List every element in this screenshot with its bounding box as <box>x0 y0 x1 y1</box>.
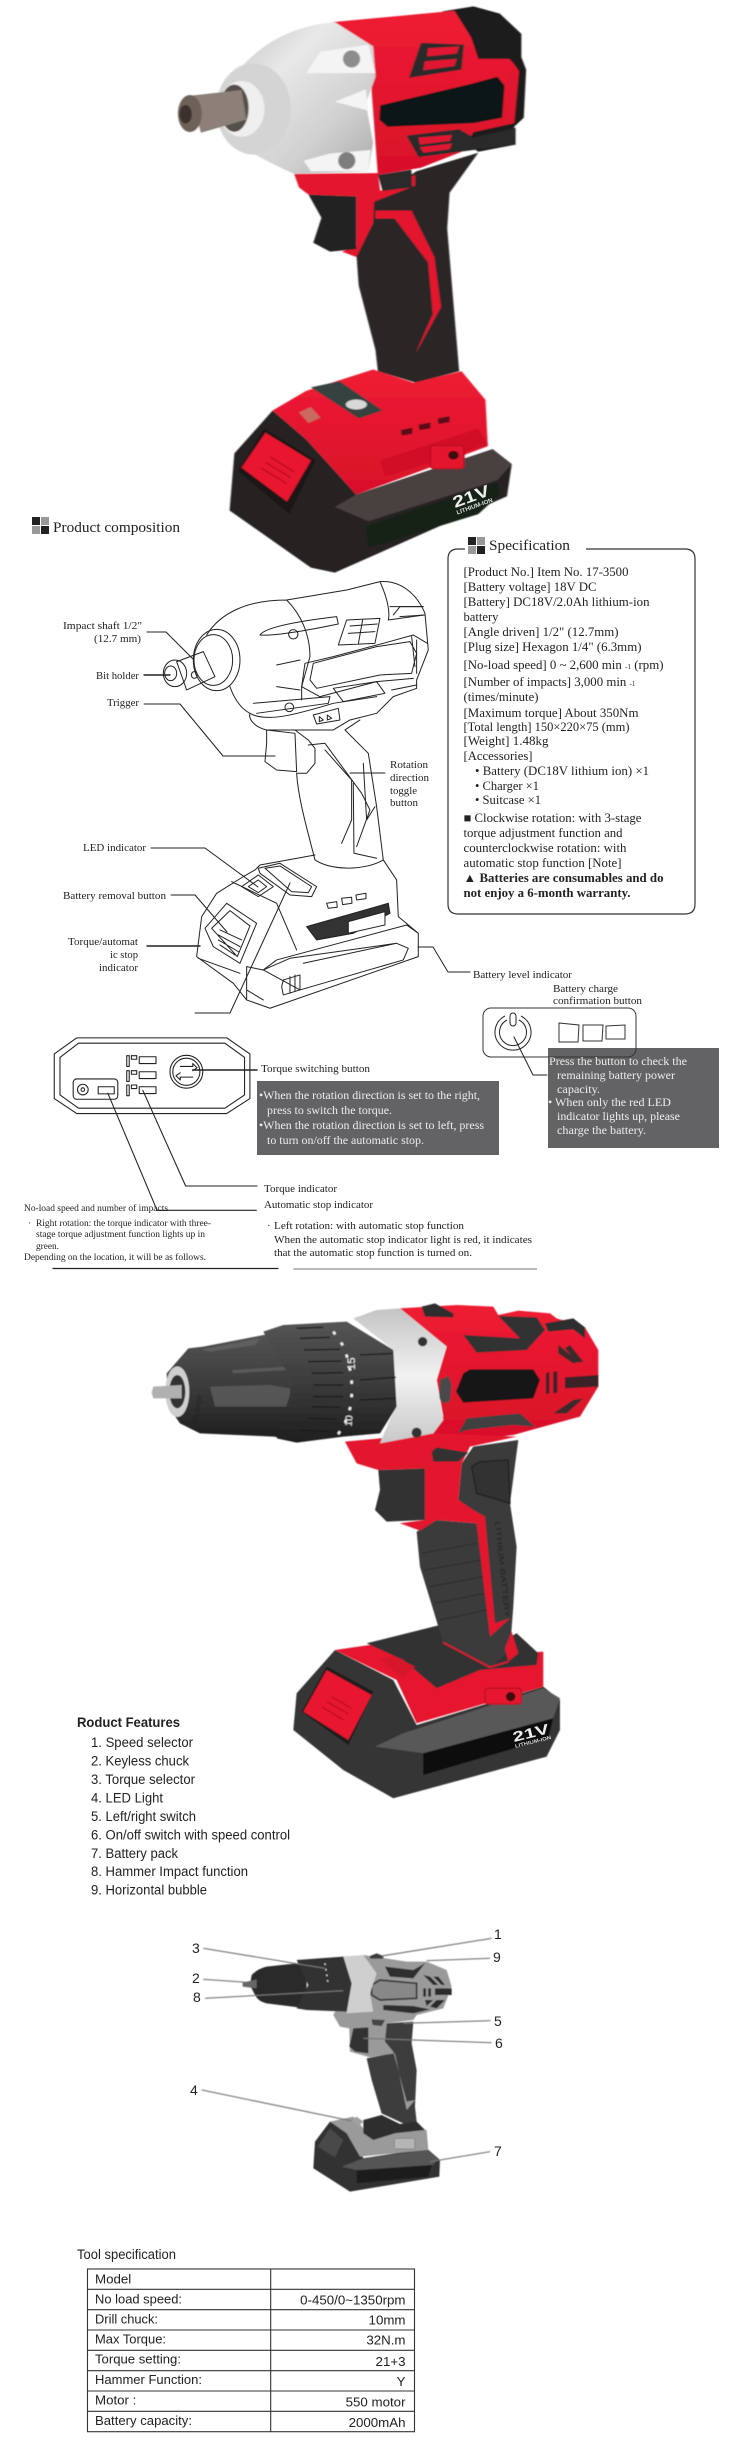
callout numbers: 5 <box>494 2013 502 2029</box>
side window <box>456 1369 540 1403</box>
control panel drawing <box>54 1038 257 1210</box>
panel: specification <box>448 537 695 914</box>
pack top strip <box>335 449 512 521</box>
note: left rotation: that the automatic stop function is turned on. <box>274 1247 472 1259</box>
heading text: Product composition <box>53 520 181 536</box>
lower dark patch <box>458 1413 535 1433</box>
diagram: greyscale drill with numbered callouts <box>190 1926 503 2192</box>
grip marking: LITHIUM BATTERY <box>493 1521 512 1618</box>
label: torque stop indicator: ic stop <box>110 949 138 961</box>
pack window <box>263 943 408 995</box>
pack window <box>366 482 500 548</box>
vent lower <box>407 128 516 157</box>
battery shell <box>293 1650 560 1798</box>
grip <box>356 153 478 383</box>
row values: 21+3 <box>376 2354 406 2369</box>
top vent <box>338 618 380 645</box>
textured pad <box>380 428 488 477</box>
release recess <box>238 428 316 514</box>
clutch <box>297 1957 352 2012</box>
spec list: not enjoy a 6-month warranty. <box>464 886 630 900</box>
front slider <box>439 1376 452 1403</box>
release button <box>303 1670 372 1740</box>
battery mount red <box>273 369 488 494</box>
label: impact shaft: Impact shaft 1/2" <box>63 620 142 632</box>
panel outline <box>54 1038 250 1114</box>
label: automatic stop: Automatic stop indicator <box>264 1199 373 1211</box>
note: left rotation: Left rotation: with automatic stop function <box>274 1220 465 1232</box>
label: torque stop indicator: indicator <box>99 962 138 974</box>
leader: rotation toggle <box>350 772 385 774</box>
spec list: counterclockwise rotation: with <box>464 841 627 855</box>
features list <box>91 1735 290 1898</box>
spec list: torque adjustment function and <box>464 826 623 840</box>
top dark patch <box>463 1316 545 1353</box>
spec list: [Weight] 1.48kg <box>464 734 549 748</box>
mount lanyard <box>485 1688 522 1704</box>
leader: impact shaft <box>147 632 193 659</box>
spec frame <box>448 549 695 914</box>
direction switch <box>432 1447 468 1462</box>
charge note text <box>548 1054 687 1137</box>
charge note text: Press the button to check the <box>549 1054 687 1068</box>
battery pack shell <box>230 411 512 573</box>
photo: impact wrench <box>178 6 526 573</box>
auto stop cell <box>73 1079 118 1099</box>
spec list: [No-load speed] 0 ~ 2,600 min -1 (rpm) <box>464 658 664 672</box>
row values: 32N.m <box>366 2332 406 2348</box>
collar vents <box>483 1669 519 1682</box>
rear slot <box>507 70 517 120</box>
side window <box>379 77 505 127</box>
callout numbers <box>190 1926 503 2159</box>
callout numbers: 3 <box>192 1940 200 1956</box>
leader: LED indicator <box>151 848 258 887</box>
spec list: [Battery] DC18V/2.0Ah lithium-ion <box>464 595 650 609</box>
drive end <box>178 95 202 132</box>
bit <box>152 1385 182 1398</box>
motor housing <box>332 11 519 175</box>
spec list: • Suitcase ×1 <box>475 793 541 807</box>
charge note box <box>548 1048 719 1148</box>
heading icon <box>32 517 49 534</box>
panel button <box>346 399 367 409</box>
grip <box>417 1440 518 1668</box>
spec list: [Battery voltage] 18V DC <box>464 580 596 594</box>
torque note text: •When the rotation direction is set to left, press <box>259 1118 484 1132</box>
battery collar <box>367 1625 538 1688</box>
note: right rotation: No-load speed and number of impacts <box>24 1203 168 1214</box>
note: left rotation: · <box>267 1220 271 1232</box>
spec list: [Accessories] <box>464 749 532 763</box>
pack strip <box>342 2150 438 2170</box>
top slots <box>327 893 366 908</box>
LED panel <box>311 381 383 418</box>
label: LED indicator: LED indicator <box>83 842 146 854</box>
battery mount red <box>335 1643 543 1723</box>
note: right rotation: green. <box>36 1242 59 1252</box>
collar ribs <box>297 1327 396 1432</box>
features list: 3. Torque selector <box>91 1772 195 1787</box>
side window <box>372 1980 417 2000</box>
spec list: automatic stop function [Note] <box>464 856 622 870</box>
screw bottom <box>338 152 355 169</box>
mount dark <box>363 2115 425 2140</box>
row labels: Drill chuck: <box>95 2312 158 2326</box>
bit <box>243 1979 257 1988</box>
trigger <box>349 2027 368 2053</box>
top knob <box>370 1953 383 1959</box>
row labels: Max Torque: <box>95 2332 166 2346</box>
note: right rotation <box>24 1203 211 1263</box>
spec list: • Charger ×1 <box>475 779 539 793</box>
row labels: Hammer Function: <box>95 2372 202 2387</box>
features list: 7. Battery pack <box>91 1846 178 1861</box>
toggle <box>313 708 340 724</box>
note: left rotation: When the automatic stop indicator light is red, it indicates <box>274 1234 532 1246</box>
callout lines <box>202 1938 492 2162</box>
leader: battery level <box>418 947 470 972</box>
label: impact shaft <box>63 620 142 645</box>
LED lens <box>242 875 273 897</box>
panel: battery charge confirmation <box>483 983 719 1148</box>
rear housing <box>400 1305 598 1440</box>
charge level squares <box>559 1023 625 1042</box>
callout numbers: 9 <box>493 1949 501 1965</box>
row labels: Model <box>95 2272 131 2286</box>
shell strip <box>375 1688 560 1753</box>
body <box>333 1955 452 2110</box>
leader: torque button <box>193 1068 257 1072</box>
top oval <box>258 863 317 897</box>
lanyard mount <box>348 912 385 933</box>
pack <box>313 2122 440 2192</box>
torque note text: to turn on/off the automatic stop. <box>267 1133 424 1147</box>
leader: auto stop <box>108 1093 256 1210</box>
text block: product features <box>77 1714 290 1898</box>
charge note text: • When only the red LED <box>548 1095 671 1109</box>
silver gear case <box>218 22 375 174</box>
spec icon <box>468 537 485 554</box>
leader: power button <box>514 1037 547 1075</box>
leader: bit holder <box>144 674 170 676</box>
grip panel <box>472 1460 510 1503</box>
row values: 550 motor <box>346 2394 406 2410</box>
spec list: [Product No.] Item No. 17-3500 <box>464 565 628 579</box>
spec list: [Angle driven] 1/2" (12.7mm) <box>464 625 618 639</box>
spec list: [Plug size] Hexagon 1/4" (6.3mm) <box>464 640 642 654</box>
spec list: (times/minute) <box>464 690 538 704</box>
bit ring inner <box>169 1375 185 1408</box>
label: torque stop indicator: Torque/automat <box>68 936 138 948</box>
torque note text <box>259 1088 484 1147</box>
spec list: ■ Clockwise rotation: with 3-stage <box>464 811 642 825</box>
lithium mark: LITHIUM-ION <box>456 498 494 516</box>
silver collar <box>342 1955 377 2013</box>
spec list: ▲ Batteries are consumables and do <box>464 871 664 885</box>
torque button <box>170 1055 203 1088</box>
chuck highlights <box>202 1338 290 1407</box>
row labels: Motor : <box>95 2392 136 2408</box>
grip bottom trim <box>443 1643 508 1667</box>
silver ribs <box>304 45 375 171</box>
grip <box>367 2022 417 2125</box>
drill battery label <box>511 1720 553 1750</box>
charge panel frame <box>483 1008 636 1057</box>
callout numbers: 1 <box>494 1926 502 1942</box>
LED lens <box>299 407 320 423</box>
screws <box>285 630 298 712</box>
note: right rotation: Right rotation: the torque indicator with three- <box>36 1219 211 1229</box>
square drive <box>191 90 246 133</box>
row values: 10mm <box>369 2312 406 2328</box>
top patch <box>383 1963 430 2013</box>
label: impact shaft: (12.7 mm) <box>94 633 141 645</box>
handle <box>297 720 383 868</box>
spec list: [Maximum torque] About 350Nm <box>464 706 639 720</box>
trigger guard <box>295 730 315 773</box>
charge label <box>553 983 642 1007</box>
body ribs <box>253 607 425 713</box>
lanyard button <box>430 446 464 469</box>
rear cap <box>545 1318 585 1338</box>
lanyard <box>394 2138 415 2149</box>
dial numbers <box>344 1357 358 1427</box>
photo: hammer drill <box>152 1303 598 1798</box>
screw top <box>343 50 360 67</box>
release recess <box>302 1667 373 1745</box>
features list: 5. Left/right switch <box>91 1809 196 1824</box>
features heading: Roduct Features <box>77 1714 180 1730</box>
pack window <box>357 2165 432 2183</box>
shell window <box>423 1718 553 1775</box>
leader: torque indicator <box>143 1090 257 1186</box>
bit ring <box>165 1366 189 1417</box>
nose inner ring <box>219 81 264 137</box>
features list: 2. Keyless chuck <box>91 1754 189 1768</box>
note: left rotation <box>267 1220 532 1259</box>
release marking: RELEASE <box>192 1393 204 1425</box>
note: right rotation: Depending on the location, it will be as follows. <box>24 1252 206 1263</box>
line drawing: impact wrench <box>163 582 428 1008</box>
label: torque indicator: Torque indicator <box>264 1183 337 1195</box>
grip rear red <box>505 1632 518 1662</box>
features list: 1. Speed selector <box>91 1735 193 1750</box>
leader: torque stop indicator <box>147 945 200 947</box>
dial dots <box>333 1332 352 1437</box>
torque note text: •When the rotation direction is set to the right, <box>259 1088 480 1102</box>
note: right rotation: · <box>28 1219 31 1229</box>
row labels <box>95 2272 202 2428</box>
rear vents <box>423 1975 452 2008</box>
label: battery removal: Battery removal button <box>63 890 167 902</box>
LED housing <box>379 1656 415 1678</box>
row labels: Torque setting: <box>95 2352 181 2366</box>
spec list <box>464 565 664 900</box>
label: torque stop indicator <box>68 936 138 974</box>
mount outline <box>197 855 418 1008</box>
spec list: • Battery (DC18V lithium ion) ×1 <box>475 764 649 778</box>
callout numbers: 2 <box>192 1970 200 1986</box>
features list: 8. Hammer Impact function <box>91 1864 248 1879</box>
nose <box>163 629 240 691</box>
table grid <box>88 2269 414 2432</box>
row values <box>300 2292 406 2430</box>
grip ribs <box>422 1543 487 1620</box>
torque indicators <box>127 1056 156 1096</box>
battery label <box>451 483 494 516</box>
dial numbers: 10 <box>344 1414 356 1427</box>
rule: left <box>52 1268 278 1270</box>
features list: 4. LED Light <box>91 1790 163 1805</box>
red lower body <box>345 1433 517 1637</box>
leader: battery removal <box>171 895 227 932</box>
callout numbers: 8 <box>193 1989 201 2005</box>
callouts: wrench labels <box>63 620 572 1013</box>
label: bit holder: Bit holder <box>96 670 139 682</box>
label: torque switching: Torque switching button <box>261 1063 371 1075</box>
torque note text: press to switch the torque. <box>267 1103 392 1117</box>
release ribs <box>261 457 294 484</box>
case screw bottom <box>412 1428 422 1438</box>
label: battery level: Battery level indicator <box>473 969 572 981</box>
charge note text: charge the battery. <box>557 1123 646 1137</box>
rear cap <box>442 6 526 152</box>
grip red strip <box>375 211 441 354</box>
chuck sleeve <box>167 1330 303 1440</box>
row labels: No load speed: <box>95 2292 182 2306</box>
callout numbers: 6 <box>495 2035 503 2051</box>
torque note box <box>257 1081 499 1155</box>
charge note text: remaining battery power <box>557 1068 675 1082</box>
row values: Y <box>397 2374 406 2389</box>
trigger <box>375 1468 425 1522</box>
spec list: battery <box>464 610 499 624</box>
vent holes <box>401 416 450 436</box>
21V mark: 21V <box>451 483 492 512</box>
charge note text: capacity. <box>557 1082 600 1096</box>
rear vent slots <box>546 1371 598 1394</box>
callout numbers: 4 <box>190 2082 198 2098</box>
case screw top <box>418 1337 427 1346</box>
switch <box>372 2019 385 2026</box>
table: tool specification <box>88 2269 414 2432</box>
spec list: [Total length] 150×220×75 (mm) <box>464 720 630 734</box>
charge label: confirmation button <box>553 995 642 1007</box>
silver gear case <box>353 1308 447 1443</box>
icon: power button <box>495 1013 531 1050</box>
side window <box>302 635 427 697</box>
nose disc <box>216 63 291 155</box>
row values: 0-450/0~1350rpm <box>300 2292 406 2308</box>
socket ring <box>220 85 249 132</box>
spec list: [Number of impacts] 3,000 min -1 <box>464 675 636 689</box>
features list: 6. On/off switch with speed control <box>91 1827 290 1842</box>
led tab <box>352 2117 363 2127</box>
label: rotation toggle: button <box>390 797 418 809</box>
vent upper <box>409 43 464 78</box>
red lower housing <box>294 173 415 257</box>
lithium mark: LITHIUM-ION <box>514 1735 552 1750</box>
label: rotation toggle: toggle <box>390 785 417 797</box>
chuck <box>250 1963 307 2008</box>
dial numbers: 15 <box>346 1357 358 1370</box>
mount <box>330 2117 428 2157</box>
note: right rotation: stage torque adjustment function lights up in <box>36 1229 205 1240</box>
release button <box>205 903 257 963</box>
panel: torque control diagram <box>24 1038 537 1269</box>
label: rotation toggle: Rotation <box>390 759 428 771</box>
trigger <box>309 195 356 252</box>
trigger <box>265 730 297 772</box>
label: trigger: Trigger <box>107 697 139 709</box>
row values: 2000mAh <box>349 2415 406 2430</box>
side vent <box>307 903 390 940</box>
head outline <box>207 582 428 730</box>
direction toggle <box>378 170 412 191</box>
row labels: Battery capacity: <box>95 2413 192 2428</box>
top button <box>422 1303 453 1317</box>
pack button <box>318 2128 343 2157</box>
release button <box>242 433 311 502</box>
leader: panel <box>195 883 290 1013</box>
heading: product composition <box>32 517 181 536</box>
label: rotation toggle: direction <box>390 772 429 784</box>
spec heading: Specification <box>489 538 571 554</box>
release ribs <box>322 1697 352 1720</box>
heading: tool specification: Tool specification <box>77 2247 176 2262</box>
features list: 9. Horizontal bubble <box>91 1883 207 1898</box>
grey drill <box>202 1938 492 2192</box>
rear grille <box>553 1345 583 1413</box>
charge note text: indicator lights up, please <box>557 1109 680 1123</box>
leader: trigger <box>144 704 275 756</box>
callout numbers: 7 <box>494 2143 502 2159</box>
rule: right <box>294 1268 537 1270</box>
charge label: Battery charge <box>553 983 618 995</box>
21V mark: 21V <box>511 1720 552 1745</box>
label: rotation toggle <box>390 759 429 809</box>
drive bore <box>179 105 192 124</box>
clutch collar <box>263 1322 397 1443</box>
dial dots <box>325 1963 328 1985</box>
